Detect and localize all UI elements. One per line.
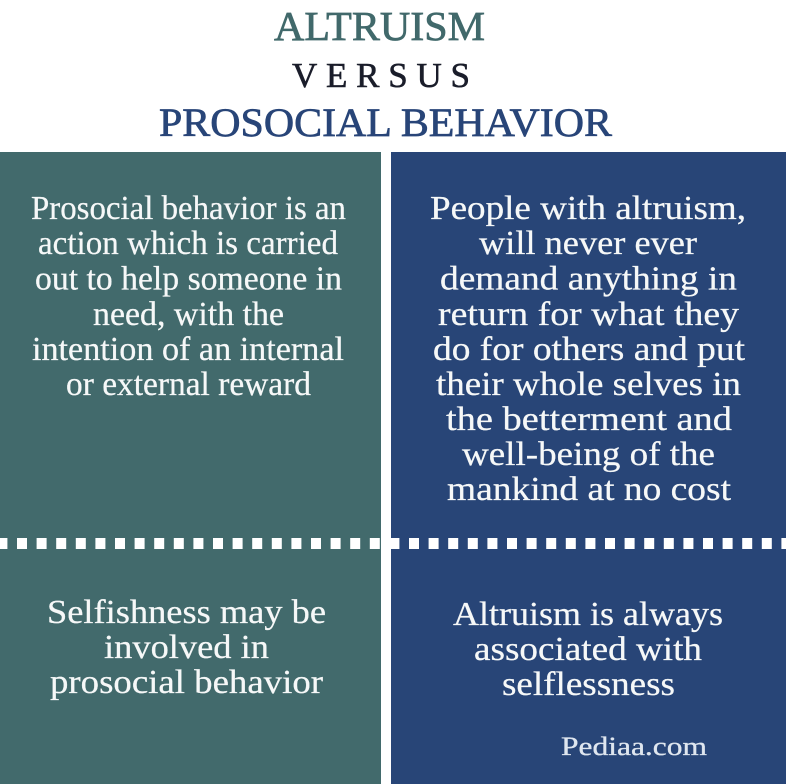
text: prosocial behavior definition: out to help someone in [35,260,342,298]
text: altruism definition: their whole selves in [436,366,741,403]
text: altruism definition: demand anything in [440,260,737,298]
text: selfishness comparison [47,594,326,701]
text: altruism definition: the betterment and [446,401,732,438]
title: versus: VERSUS [292,56,470,95]
panel: altruism column [391,152,786,784]
text: prosocial behavior definition [31,190,346,403]
text: selflessness comparison: Altruism is always [453,596,723,633]
text: selfishness comparison: Selfishness may be [47,594,326,631]
text: altruism definition: will never ever [479,225,698,262]
text: selfishness comparison: involved in [104,629,269,666]
text: prosocial behavior definition: intention of an internal [32,331,344,368]
title: altruism: ALTRUISM [274,3,485,49]
text: altruism definition: well-being of the [462,436,715,473]
title: prosocial behavior: PROSOCIAL BEHAVIOR [159,100,612,145]
text: prosocial behavior definition: or external reward [66,366,311,403]
text: altruism definition: People with altruism, [430,190,746,227]
panel: prosocial behavior column [0,152,381,784]
watermark: Pediaa.com: Pediaa.com [561,732,707,761]
text: selfishness comparison: prosocial behavior [50,664,324,701]
text: prosocial behavior definition: Prosocial behavior is an [31,190,346,227]
text: altruism definition: do for others and put [433,331,746,368]
text: selflessness comparison: associated with [474,631,702,668]
text: altruism definition: return for what they [438,296,739,333]
text: selflessness comparison [453,596,723,703]
text: altruism definition [430,190,746,508]
dotted divider [0,538,786,549]
text: prosocial behavior definition: need, with the [93,296,284,333]
text: selflessness comparison: selflessness [502,666,675,703]
text: altruism definition: mankind at no cost [447,471,732,508]
title block [159,3,612,145]
text: prosocial behavior definition: action which is carried [38,225,338,262]
